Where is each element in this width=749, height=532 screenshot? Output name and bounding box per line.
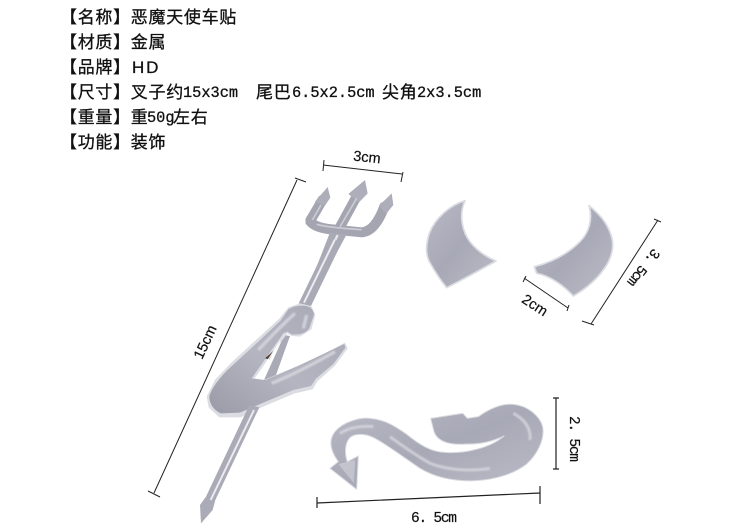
tail piece: [330, 404, 543, 489]
spec: weight: 左右: [173, 108, 208, 127]
chrome highlights: [258, 313, 335, 383]
dimension: tail height 2.5cm: 2. 5cm: [565, 416, 581, 462]
spec: size: [60, 83, 481, 102]
dimension: horn width 2cm: 2cm: [519, 292, 550, 320]
lower shaft and point: [200, 405, 259, 523]
spec: name: 【名称】恶魔天使车贴: [60, 8, 237, 27]
spec: weight: 50g: [147, 109, 175, 127]
tail wrapped around the trident: [207, 303, 348, 417]
dimension: tail length 6.5cm: [317, 486, 540, 527]
spec: material: 【材质】金属: [60, 33, 166, 52]
spec: size: 2x3.5cm: [417, 84, 481, 102]
spec: size: 6.5x2.5cm: [292, 84, 375, 102]
spec: weight: [60, 108, 208, 127]
spec: size: 15x3cm: [183, 84, 238, 102]
trident fork: [310, 180, 393, 266]
spec: brand: HD: [132, 58, 160, 77]
dimension: tail height 2.5cm: [553, 398, 581, 469]
tail body: [207, 303, 348, 417]
left horn: [427, 201, 496, 288]
spec: brand: 【品牌】: [60, 58, 131, 77]
dimension: horn width 2cm: [519, 276, 569, 320]
right horn: [534, 206, 613, 296]
dimension: trident length 15cm: 15cm: [191, 323, 221, 362]
product specification list: [60, 8, 481, 152]
inner shaft: [264, 335, 290, 380]
spec: weight: 【重量】重: [60, 108, 148, 127]
spec: function: 【功能】装饰: [60, 133, 166, 152]
spec: size: 【尺寸】叉子约: [60, 83, 184, 102]
dimension: tail length 6.5cm: 6. 5cm: [411, 511, 457, 527]
dimension: fork width 3cm: 3cm: [352, 149, 381, 167]
dimension: fork width 3cm: [323, 149, 403, 182]
upper shaft: [299, 240, 343, 307]
dimension: trident length 15cm: [148, 178, 306, 497]
dark reflection: [265, 349, 275, 359]
dimension: horn height 3.5cm: 3. 5cm: [623, 245, 662, 289]
dimension: horn height 3.5cm: [582, 219, 662, 325]
spec: size: 尾巴: [256, 83, 291, 102]
spec: size: 尖角: [382, 83, 417, 102]
